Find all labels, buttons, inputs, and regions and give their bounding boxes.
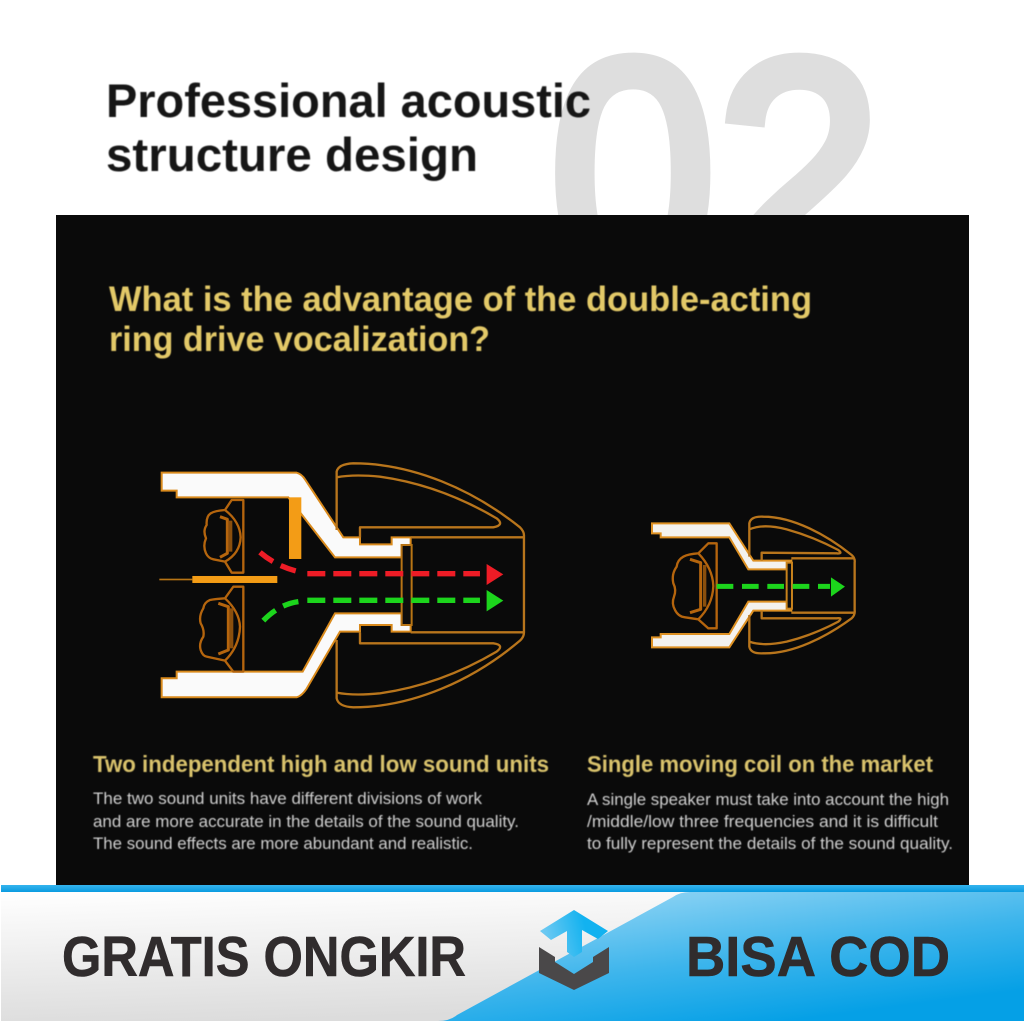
right column text bbox=[587, 751, 953, 853]
logo arrow bbox=[540, 910, 608, 957]
lower housing wall bbox=[162, 613, 411, 697]
large background number 02: 0 bbox=[550, 0, 716, 351]
driver unit bbox=[673, 543, 717, 628]
left subheading: Two independent high and low sound units bbox=[93, 751, 549, 777]
banner text: free shipping: GRATIS ONGKIR bbox=[62, 925, 466, 989]
upper driver unit bbox=[204, 500, 243, 573]
orange divider vertical bbox=[289, 497, 301, 559]
red sound path arrow bbox=[260, 552, 503, 585]
right description: to fully represent the details of the sound quality. bbox=[587, 835, 953, 853]
banner text: cash on delivery: BISA COD bbox=[686, 925, 950, 989]
right subheading: Single moving coil on the market bbox=[587, 751, 933, 777]
panel heading: What is the advantage of the double-acting bbox=[109, 280, 812, 319]
logo chevron base bbox=[539, 947, 609, 990]
title bbox=[106, 74, 591, 181]
left description: The sound effects are more abundant and realistic. bbox=[93, 835, 473, 853]
left white panel bbox=[1, 892, 1024, 1021]
right description: /middle/low three frequencies and it is difficult bbox=[587, 813, 938, 831]
left description: and are more accurate in the details of the sound quality. bbox=[93, 813, 519, 831]
bottom banner bbox=[1, 885, 1024, 1021]
ear tip outline bbox=[337, 463, 524, 707]
large background number 02: 2 bbox=[716, 0, 882, 351]
right description: A single speaker must take into account the high bbox=[587, 791, 949, 809]
lower driver unit bbox=[200, 587, 243, 672]
ear tip outline bbox=[749, 517, 855, 653]
baffle bar bbox=[787, 563, 792, 609]
blue top strip bbox=[1, 885, 1024, 892]
right blue panel bbox=[438, 892, 1024, 1021]
lower housing wall bbox=[652, 602, 791, 647]
panel heading bbox=[109, 280, 812, 359]
green sound path arrow bbox=[263, 590, 503, 621]
left description: The two sound units have different divisions of work bbox=[93, 790, 483, 808]
green sound path arrow bbox=[717, 577, 845, 597]
upper housing wall bbox=[162, 473, 411, 557]
title: structure design bbox=[106, 128, 478, 181]
panel: black comparison panel bbox=[56, 215, 969, 885]
left column text bbox=[93, 751, 549, 853]
divider thin line bbox=[159, 579, 193, 580]
panel heading: ring drive vocalization? bbox=[109, 320, 490, 359]
diagram: dual driver earphone bbox=[159, 463, 524, 707]
diagram: single driver earphone bbox=[652, 517, 855, 653]
orange divider horizontal bbox=[192, 576, 277, 583]
title: Professional acoustic bbox=[106, 74, 591, 127]
left description bbox=[93, 790, 519, 853]
icon: logo bbox=[539, 910, 609, 990]
damping baffle bar bbox=[402, 545, 412, 625]
upper housing wall bbox=[652, 523, 791, 569]
large background number 02 bbox=[555, 52, 870, 215]
right description bbox=[587, 791, 953, 853]
